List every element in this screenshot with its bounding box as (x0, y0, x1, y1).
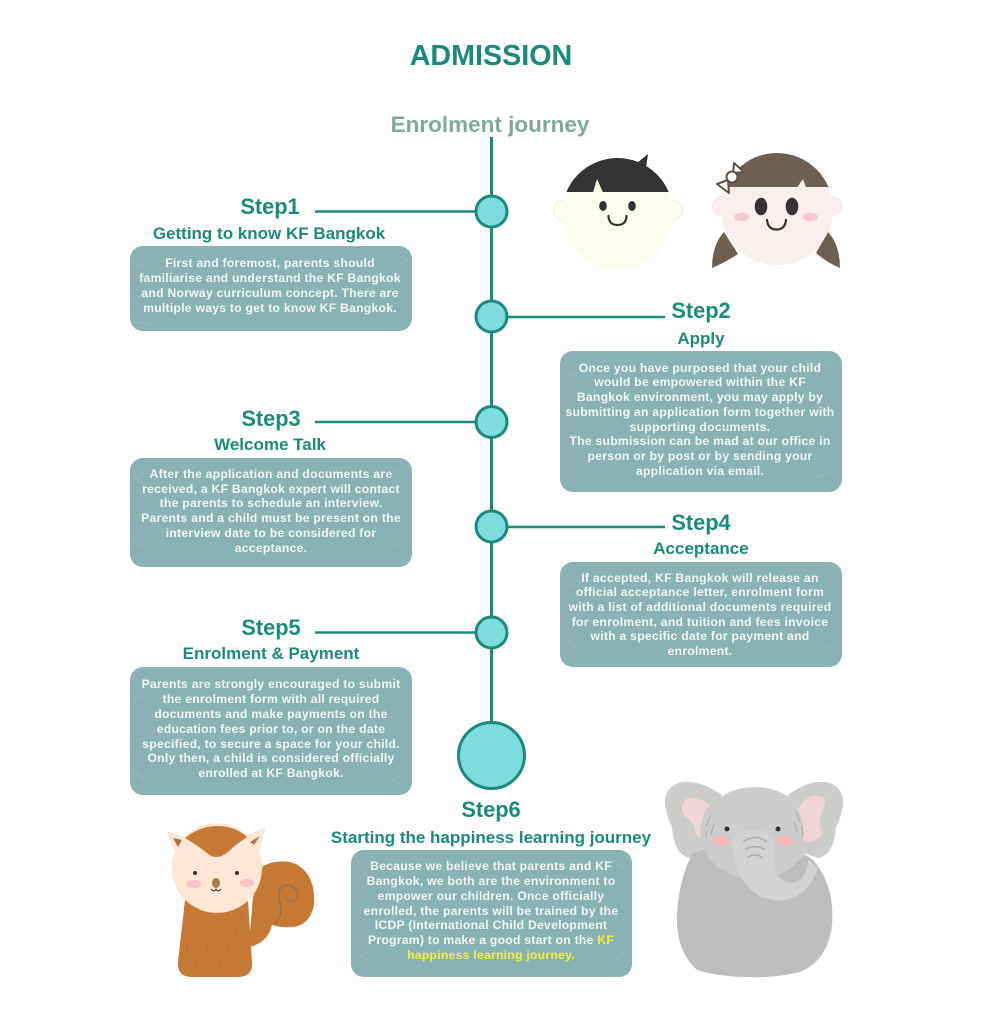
step 5: documents and make payments on the (154, 707, 388, 721)
step 5: enrolled at KF Bangkok. (198, 766, 344, 780)
step 5: education fees prior to, or on the date (157, 722, 385, 736)
step 6: Bangkok, we both are the environment to (367, 874, 615, 888)
step 4: Acceptance (653, 539, 749, 558)
step 1: multiple ways to get to know KF Bangkok. (143, 301, 397, 315)
subtitle: enrolment journey: Enrolment journey (391, 112, 590, 137)
step 3: received, a KF Bangkok expert will contact (142, 482, 400, 496)
step 3: the parents to schedule an interview. (160, 496, 382, 510)
step 2: Bangkok environment, you may apply by (577, 390, 823, 404)
step 2: Step2 (671, 298, 731, 323)
title: ADMISSION (410, 40, 572, 72)
icon: elephant (665, 782, 843, 977)
step 3: acceptance. (235, 541, 307, 555)
step 1: First and foremost, parents should (165, 256, 375, 270)
step 2: person or by post or by sending your (587, 449, 813, 463)
icon: boy face (554, 154, 682, 269)
step 6: Because we believe that parents and KF (370, 859, 612, 873)
step 5: Enrolment & Payment (183, 644, 360, 663)
step 1 (130, 194, 412, 331)
step 3: Welcome Talk (214, 435, 326, 454)
step 2 (560, 298, 842, 492)
step 2: would be empowered within the KF (593, 375, 806, 389)
step 6: enrolled, the parents will be trained by the (364, 904, 618, 918)
timeline (315, 137, 665, 788)
step 5: Parents are strongly encouraged to submit (142, 677, 400, 691)
step 1: familiarise and understand the KF Bangkok (139, 271, 401, 285)
step 4: enrolment. (668, 644, 732, 658)
step 5: Step5 (241, 615, 301, 640)
step 2: Apply (677, 329, 725, 348)
step 2: supporting documents. (630, 420, 770, 434)
step 4: official acceptance letter, enrolment form (576, 585, 824, 599)
step 6: ICDP (International Child Development (375, 918, 607, 932)
step 6: Starting the happiness learning journey (331, 828, 652, 847)
step 3 (130, 406, 412, 567)
step 6: Step6 (461, 797, 521, 822)
step 6: empower our children. Once officially (378, 889, 604, 903)
icon: squirrel (168, 823, 314, 977)
step 2: Once you have purposed that your child (579, 361, 821, 375)
step 5: specified, to secure a space for your child. (142, 737, 400, 751)
step 1: Getting to know KF Bangkok (153, 224, 386, 243)
step 6: happiness learning journey. (407, 948, 575, 962)
step 4: with a specific date for payment and (590, 629, 809, 643)
step 6 (331, 797, 652, 977)
icon: hair bow (717, 163, 744, 193)
step 4 (560, 510, 842, 667)
step 2: submitting an application form together with (566, 405, 834, 419)
step 4: with a list of additional documents required (568, 600, 831, 614)
step 5: Only then, a child is considered officially (147, 751, 395, 765)
icon: girl face (712, 153, 842, 268)
step 1: and Norway curriculum concept. There are (141, 286, 399, 300)
step 4: Step4 (671, 510, 731, 535)
step 2: application via email. (636, 464, 764, 478)
step 5 (130, 615, 412, 795)
step 5: the enrolment form with all required (163, 692, 379, 706)
step 3: Step3 (241, 406, 301, 431)
step 1: Step1 (240, 194, 300, 219)
step 4: for enrolment, and tuition and fees invoice (572, 615, 828, 629)
step 3: Parents and a child must be present on the (141, 511, 401, 525)
step 4: If accepted, KF Bangkok will release an (581, 571, 819, 585)
step 2: The submission can be mad at our office in (569, 434, 831, 448)
step 3: After the application and documents are (150, 467, 392, 481)
step 6: Program) to make a good start on the KF (368, 933, 614, 947)
step 3: interview date to be considered for (166, 526, 376, 540)
